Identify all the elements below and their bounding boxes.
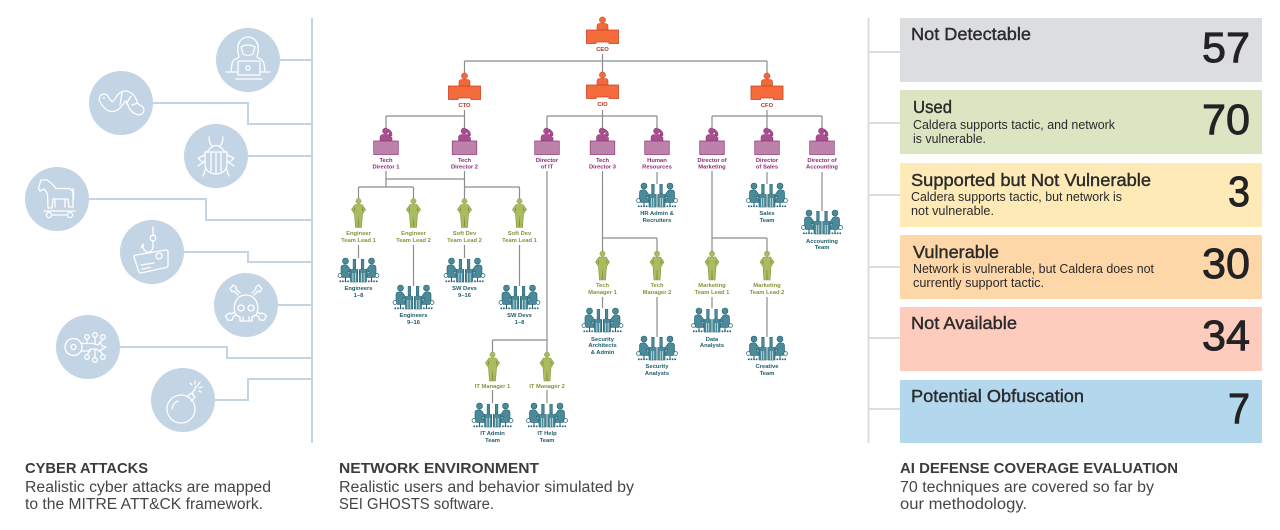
- team: Engineers 9-16: 9–16: [407, 320, 421, 326]
- node: Human Resources: Human: [647, 158, 667, 164]
- node: Director of Accounting: Accounting: [806, 164, 838, 170]
- caption: AI defense coverage evaluation: 70 techniques are covered so far by: [900, 479, 1154, 496]
- node: Human Resources: Resources: [642, 164, 672, 170]
- node: Director of Accounting: Director of: [807, 158, 837, 164]
- team: HR Admin and Recruiters: HR Admin &: [640, 211, 674, 217]
- team: Engineers 1-8: Engineers: [344, 286, 373, 292]
- node: Director of Marketing: Marketing: [698, 164, 726, 170]
- caption: AI defense coverage evaluation: [900, 460, 1178, 513]
- node: Tech Director 1: Tech: [379, 158, 393, 164]
- team: SW Devs 9-16: SW Devs: [452, 286, 477, 292]
- team: IT Admin Team: IT Admin: [480, 431, 505, 437]
- node: Tech Manager 2: [643, 251, 671, 296]
- panel: cyber attacks: [25, 18, 312, 443]
- node: Director of Marketing: [697, 128, 727, 170]
- caption: AI defense coverage evaluation: AI DEFENSE COVERAGE EVALUATION: [900, 460, 1178, 477]
- node: Engineer Team Lead 2: Team Lead 2: [396, 238, 431, 244]
- team: IT Admin Team: Team: [485, 438, 500, 444]
- node: CEO: CEO: [596, 47, 609, 53]
- result: Supported but Not Vulnerable: not vulnerable.: [911, 204, 994, 218]
- org chart connector lines: [358, 54, 822, 403]
- team: IT Help Team: [526, 403, 568, 444]
- team: Data Analysts: Analysts: [700, 343, 724, 349]
- team: Engineers 9-16: [393, 285, 434, 326]
- node: Marketing Team Lead 2: Marketing: [753, 283, 781, 289]
- node: Engineer Team Lead 2: Engineer: [401, 231, 427, 237]
- team: Sales Team: Team: [760, 218, 774, 224]
- node: Tech Manager 1: [588, 251, 618, 296]
- result: Used: Caldera supports tactic, and network: [913, 118, 1116, 132]
- team: Security Architects and Admin: Architects: [588, 343, 617, 349]
- node: Soft Dev Team Lead 1: Soft Dev: [508, 231, 532, 237]
- node: Director of Accounting: [806, 128, 838, 170]
- team: Engineers 1-8: 1–8: [354, 293, 364, 299]
- node: Tech Director 2: Tech: [458, 158, 472, 164]
- node: Soft Dev Team Lead 1: [502, 199, 538, 244]
- coverage connector lines: [868, 18, 900, 443]
- node: Director of Sales: Director: [756, 158, 779, 164]
- node: Director of Marketing: Director of: [697, 158, 727, 164]
- team: Accounting Team: Accounting: [806, 239, 838, 245]
- team: SW Devs 9-16: [444, 258, 485, 299]
- node: IT Manager 1: IT Manager 1: [475, 384, 511, 390]
- icon: hacker: [216, 28, 280, 92]
- node: Marketing Team Lead 1: Marketing: [698, 283, 726, 289]
- team: Accounting Team: [802, 210, 842, 251]
- node: Marketing Team Lead 2: [750, 251, 784, 296]
- result: Not Detectable: Not Detectable: [911, 24, 1031, 44]
- caption: cyber attacks: [25, 460, 271, 513]
- connectors: [89, 60, 312, 400]
- team: Security Architects and Admin: & Admin: [591, 350, 615, 356]
- node: CEO: [586, 17, 618, 53]
- result: Vulnerable: Network is vulnerable, but Caldera does not: [913, 262, 1155, 276]
- team: Data Analysts: Data: [706, 337, 719, 343]
- node: CTO: CTO: [458, 103, 471, 109]
- result: Not Available: [900, 307, 1262, 371]
- node: IT Manager 2: [529, 352, 565, 390]
- team: Security Architects and Admin: Security: [591, 337, 615, 343]
- node: Marketing Team Lead 2: Team Lead 2: [750, 290, 784, 296]
- team: IT Admin Team: [472, 403, 513, 444]
- team: Security Architects and Admin: [582, 308, 623, 356]
- team: SW Devs 1-8: [499, 285, 540, 326]
- icon: bomb: [151, 368, 215, 432]
- team: Security Analysts: Analysts: [645, 371, 669, 377]
- node: CTO: [448, 73, 480, 109]
- team: Creative Team: [746, 336, 788, 377]
- result: Vulnerable: 30: [1202, 240, 1250, 288]
- result: Not Detectable: [900, 18, 1262, 82]
- icon: skull and crossbones: [214, 273, 278, 337]
- result: Supported but Not Vulnerable: [900, 163, 1262, 227]
- result: Potential Obfuscation: [900, 380, 1262, 443]
- caption: cyber attacks: Realistic cyber attacks are mapped: [25, 479, 271, 496]
- team: Creative Team: Team: [760, 371, 774, 377]
- node: Soft Dev Team Lead 2: Soft Dev: [453, 231, 477, 237]
- node: Engineer Team Lead 1: Engineer: [346, 231, 372, 237]
- team: SW Devs 1-8: SW Devs: [507, 313, 532, 319]
- node: Engineer Team Lead 2: [396, 199, 431, 244]
- team: Sales Team: Sales: [759, 211, 775, 217]
- team: HR Admin and Recruiters: [636, 183, 678, 224]
- node: Tech Manager 1: Tech: [596, 283, 610, 289]
- caption: cyber attacks: CYBER ATTACKS: [25, 460, 148, 477]
- team: Engineers 1-8: [338, 258, 379, 299]
- result: Supported but Not Vulnerable: Caldera supports tactic, but network is: [911, 190, 1122, 204]
- node: CFO: [751, 73, 783, 109]
- team: Security Analysts: Security: [646, 364, 669, 370]
- node: Tech Director 3: Director 3: [589, 164, 617, 170]
- node: CIO: [586, 72, 618, 108]
- team: HR Admin and Recruiters: Recruiters: [643, 218, 671, 224]
- result: Supported but Not Vulnerable: Supported but Not Vulnerable: [911, 170, 1151, 190]
- icon: worm: [89, 71, 153, 135]
- node: Soft Dev Team Lead 2: Team Lead 2: [447, 238, 482, 244]
- node: Tech Director 3: Tech: [596, 158, 610, 164]
- caption: network environment: NETWORK ENVIRONMENT: [339, 460, 539, 477]
- result: Not Available: 34: [1202, 312, 1250, 360]
- node: Tech Manager 2: Manager 2: [643, 290, 671, 296]
- icon: trojan horse: [25, 167, 89, 231]
- node: Soft Dev Team Lead 1: Team Lead 1: [502, 238, 538, 244]
- spine line: [311, 18, 313, 443]
- result: Used: Used: [913, 97, 952, 117]
- node: Director of IT: [535, 128, 559, 170]
- node: CFO: CFO: [761, 103, 774, 109]
- result: Vulnerable: [900, 235, 1262, 299]
- result: Potential Obfuscation: Potential Obfuscation: [911, 386, 1084, 406]
- caption: network environment: Realistic users and behavior simulated by: [339, 479, 634, 496]
- result: Supported but Not Vulnerable: 3: [1228, 168, 1250, 216]
- node: Tech Director 2: [451, 128, 478, 170]
- node: Marketing Team Lead 1: Team Lead 1: [695, 290, 730, 296]
- result: Potential Obfuscation: 7: [1228, 385, 1250, 433]
- node: Soft Dev Team Lead 2: [447, 199, 482, 244]
- node: Tech Director 1: Director 1: [372, 164, 400, 170]
- caption: AI defense coverage evaluation: our methodology.: [900, 496, 1027, 513]
- node: Director of IT: Director: [536, 158, 559, 164]
- node: Tech Director 2: Director 2: [451, 164, 478, 170]
- icon: digital key: [56, 315, 120, 379]
- panel: network environment org chart: [338, 17, 842, 444]
- node: Tech Director 3: [589, 128, 617, 170]
- result: Vulnerable: currently support tactic.: [913, 276, 1044, 290]
- node: Director of Sales: [755, 128, 779, 170]
- node: Engineer Team Lead 1: [341, 199, 377, 244]
- node: CIO: CIO: [597, 102, 608, 108]
- node: IT Manager 1: [475, 352, 511, 390]
- node: Tech Manager 1: Manager 1: [588, 290, 618, 296]
- result: Not Available: Not Available: [911, 313, 1017, 333]
- team: Sales Team: [746, 183, 788, 224]
- team: Security Analysts: [636, 336, 678, 377]
- caption: network environment: [339, 460, 634, 513]
- result: Used: [900, 90, 1262, 154]
- node: Human Resources: [642, 128, 672, 170]
- result: Used: 70: [1202, 96, 1250, 144]
- node: Director of Sales: of Sales: [756, 164, 778, 170]
- node: Tech Director 1: [372, 128, 400, 170]
- team: IT Help Team: IT Help: [537, 431, 557, 437]
- team: Creative Team: Creative: [756, 364, 779, 370]
- caption: cyber attacks: to the MITRE ATT&CK framework.: [25, 496, 263, 513]
- result: Vulnerable: Vulnerable: [913, 242, 999, 262]
- team: IT Help Team: Team: [540, 438, 554, 444]
- result: Not Detectable: 57: [1202, 24, 1250, 72]
- icon: phishing card: [120, 220, 184, 284]
- caption: network environment: SEI GHOSTS software.: [339, 496, 494, 513]
- team: Accounting Team: Team: [815, 245, 829, 251]
- node: Engineer Team Lead 1: Team Lead 1: [341, 238, 377, 244]
- team: Engineers 9-16: Engineers: [399, 313, 428, 319]
- team: SW Devs 9-16: 9–16: [458, 293, 472, 299]
- panel: AI defense coverage results: [868, 18, 1262, 443]
- node: Tech Manager 2: Tech: [650, 283, 664, 289]
- node: Director of IT: of IT: [541, 164, 554, 170]
- node: IT Manager 2: IT Manager 2: [529, 384, 565, 390]
- node: Marketing Team Lead 1: [695, 251, 730, 296]
- result: Used: is vulnerable.: [913, 132, 986, 146]
- team: Data Analysts: [692, 308, 732, 349]
- icon: bug: [184, 124, 248, 188]
- team: SW Devs 1-8: 1–8: [515, 320, 525, 326]
